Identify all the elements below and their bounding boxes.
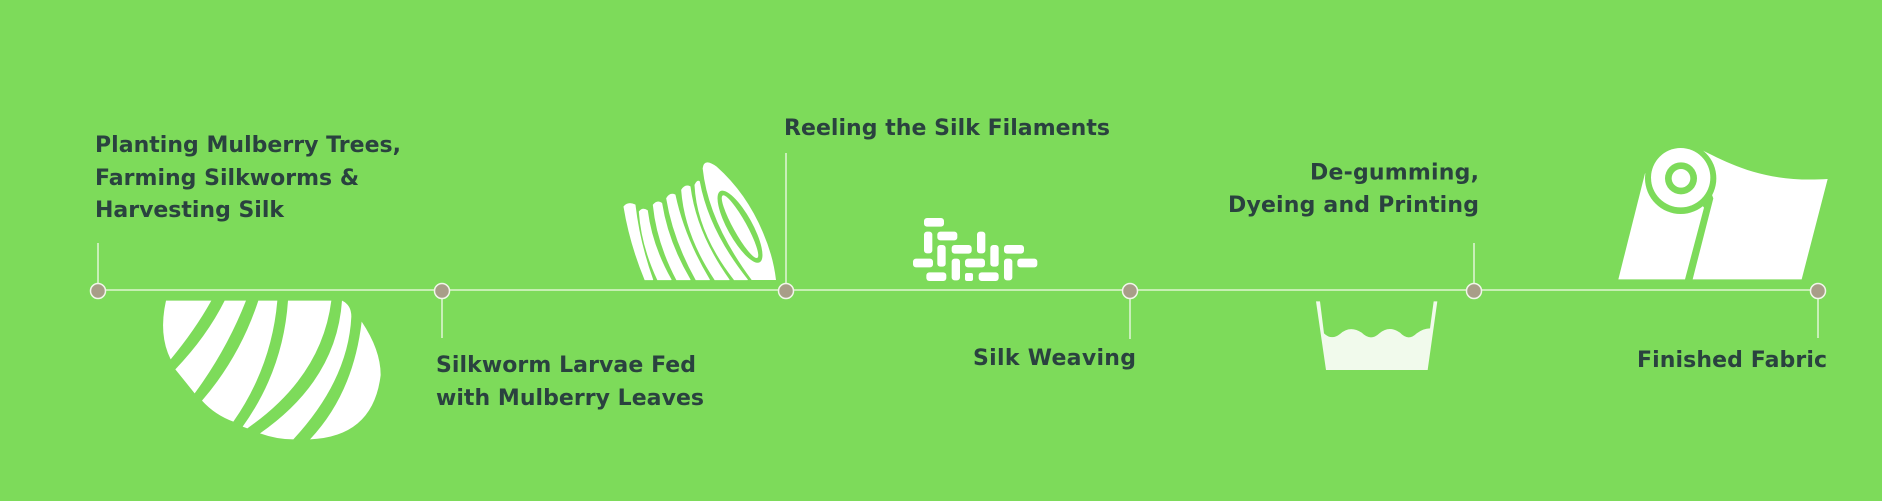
icon: silk reel	[624, 162, 776, 280]
icon: dye basin	[1316, 301, 1437, 370]
step 5 label: De-gumming,	[1310, 160, 1479, 186]
step 1 label: Harvesting Silk	[95, 198, 285, 223]
icon: silkworm cocoon	[163, 301, 381, 439]
icon: fabric roll	[1618, 143, 1828, 279]
step 5 label	[1228, 160, 1479, 218]
step 2 label: Silkworm Larvae Fed	[436, 353, 696, 378]
step 2 label: with Mulberry Leaves	[436, 386, 704, 411]
step 1 label: Planting Mulberry Trees,	[95, 133, 401, 158]
step 2 label	[436, 353, 704, 411]
step 5 label: Dyeing and Printing	[1228, 193, 1479, 218]
step 1 label	[95, 133, 401, 223]
timeline axis with stems and nodes	[90, 153, 1826, 339]
step 6 label: Finished Fabric	[1637, 348, 1827, 373]
step 1 label: Farming Silkworms &	[95, 166, 359, 191]
icon: woven fabric pattern	[913, 218, 1037, 281]
step 3 label: Reeling the Silk Filaments	[784, 116, 1110, 141]
step 4 label: Silk Weaving	[973, 346, 1136, 371]
